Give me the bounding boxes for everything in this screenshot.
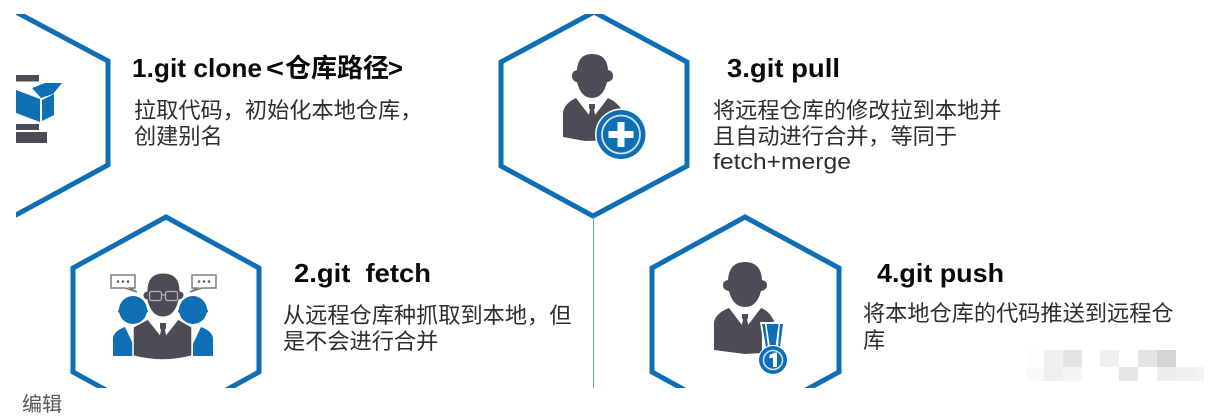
- watermark mosaic: [1027, 350, 1204, 381]
- text block 3: fetch+merge: [713, 149, 851, 174]
- text block 1: 创建别名: [134, 124, 223, 149]
- hexagon 3: [501, 12, 687, 216]
- caption: 编辑: [22, 393, 62, 416]
- heading 1: 仓库路径: [285, 53, 389, 83]
- text block 3: 将远程仓库的修改拉到本地并: [713, 98, 1001, 123]
- text block 2: 是不会进行合并: [283, 329, 438, 354]
- heading 2: 2.git fetch: [294, 258, 431, 288]
- hexagon 2: [70, 214, 262, 388]
- panel: step 2 git fetch: [70, 214, 571, 388]
- heading 1: <: [266, 53, 284, 83]
- hexagon 1: [16, 14, 110, 218]
- hexagon 4: [650, 214, 842, 388]
- text block 4: 将本地仓库的代码推送到远程仓: [863, 301, 1174, 326]
- text block 1: 拉取代码，初始化本地仓库，: [134, 98, 422, 123]
- text block 3: 且自动进行合并，等同于: [713, 124, 957, 149]
- icon: box on computer: [16, 75, 62, 143]
- panel: step 1 git clone: [0, 11, 422, 216]
- icon: person with plus: [563, 54, 647, 160]
- heading 1: >: [388, 53, 403, 83]
- icon: person with medal: [714, 262, 788, 375]
- icon: team with speech bubbles: [111, 273, 216, 360]
- panel: step 4 git push: [650, 214, 1173, 388]
- heading 4: 4.git push: [877, 258, 1004, 288]
- text block 4: 库: [863, 328, 885, 353]
- text block 2: 从远程仓库种抓取到本地，但: [283, 303, 571, 328]
- panel: step 3 git pull: [501, 12, 1001, 216]
- heading 3: 3.git pull: [727, 53, 840, 83]
- heading 1: 1.git clone: [132, 53, 262, 83]
- connector line: [592, 217, 594, 388]
